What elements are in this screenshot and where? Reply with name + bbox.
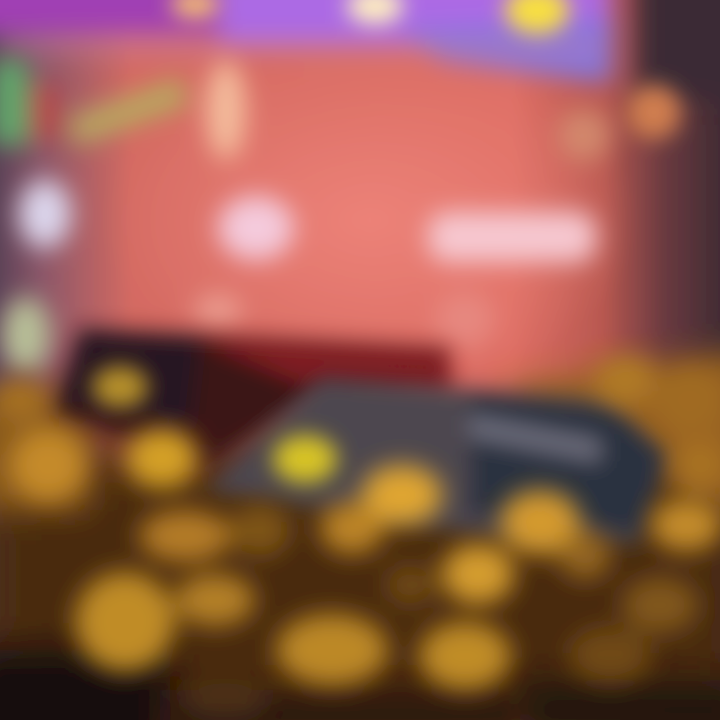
bottom dark coin bed	[0, 350, 720, 720]
top yellow lights	[171, 0, 569, 34]
yellow chip on dark card	[92, 366, 148, 408]
gold coins	[0, 356, 720, 715]
white blurred text blobs	[2, 180, 596, 373]
top purple band	[0, 0, 720, 100]
orange circle	[627, 85, 681, 139]
dark maroon card	[52, 328, 452, 470]
grey and navy card	[205, 378, 668, 545]
left green and orange accents	[0, 60, 611, 161]
yellow chip on grey card	[273, 435, 337, 483]
